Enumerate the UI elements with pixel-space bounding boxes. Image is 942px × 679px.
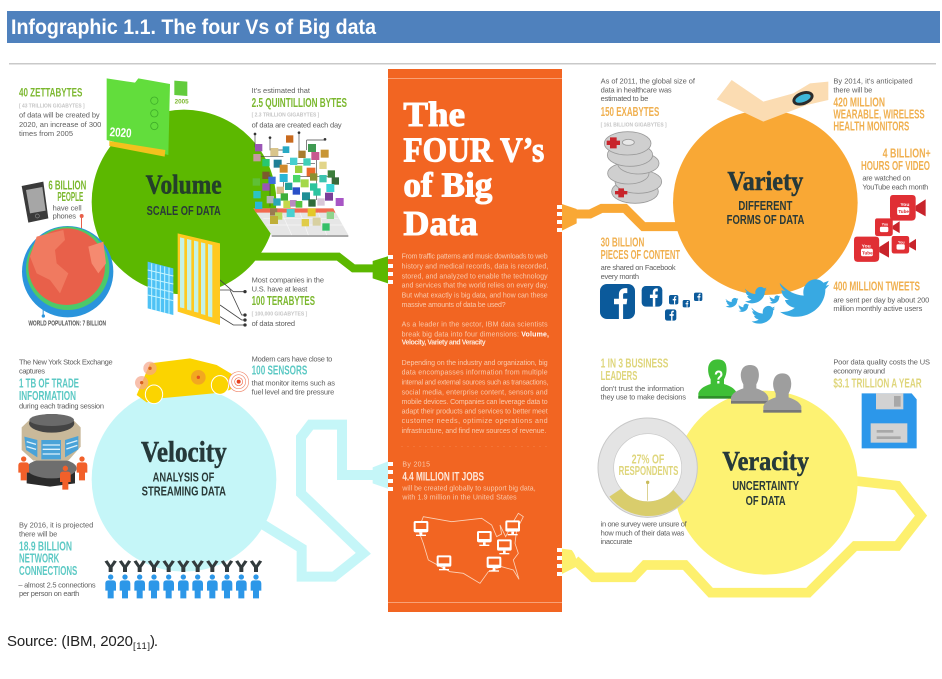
text: intro paragraph xyxy=(402,253,548,309)
text: 420 million wearable monitors xyxy=(833,76,925,134)
text: industry paragraph: adapt their products and services to better meet xyxy=(402,408,548,415)
heading: variety: DIFFERENT xyxy=(738,198,792,213)
text: 100 terabytes: U.S. have at least xyxy=(252,284,308,293)
icon: globe xyxy=(22,214,113,318)
text: 40 zettabytes: 40 ZETTABYTES xyxy=(19,86,82,100)
panel: the four Vs centre column xyxy=(388,69,562,612)
source note: [11] xyxy=(133,641,150,652)
title xyxy=(7,11,940,43)
heading: veracity: OF DATA xyxy=(746,493,786,508)
text: IBM paragraph: As a leader in the sector, IBM data scientists xyxy=(402,322,548,329)
main title: FOUR V’s xyxy=(403,132,544,170)
main title: The xyxy=(403,96,465,134)
text: industry paragraph: Depending on the industry and organization, big xyxy=(402,360,548,367)
text: industry paragraph xyxy=(402,360,548,435)
text: survey caption: inaccurate xyxy=(601,537,632,546)
text: 1 in 3 business leaders: LEADERS xyxy=(601,369,637,383)
panel: volume xyxy=(19,78,390,328)
text: 30 billion pieces of content: 30 BILLION xyxy=(601,236,644,250)
text: 18.9 billion network connections: 18.9 BILLION xyxy=(19,540,72,554)
source note: ). xyxy=(150,633,158,650)
text: 6 billion people xyxy=(48,178,86,221)
text: 1 in 3 business leaders: 1 IN 3 BUSINESS xyxy=(601,357,668,371)
text: IBM paragraph: break big data into four dimensions: Volume, xyxy=(402,331,549,338)
text: $3.1 trillion a year xyxy=(833,358,930,390)
text: 40 zettabytes: 2020, an increase of 300 xyxy=(19,120,101,129)
text: 150 exabytes: [ 161 BILLION GIGABYTES ] xyxy=(601,123,667,129)
text: industry paragraph: infrastructure, and find new sources of revenue. xyxy=(402,428,546,435)
text: 100 sensors: Modern cars have close to xyxy=(252,354,332,363)
text: industry paragraph: customer needs, optimize operations and xyxy=(402,418,548,425)
text: 150 exabytes xyxy=(601,76,696,129)
connector wire: veracity xyxy=(560,481,921,593)
text: 100 terabytes xyxy=(252,275,324,328)
heading: volume xyxy=(146,169,222,218)
icon: phone xyxy=(22,182,48,223)
map: US with monitors xyxy=(414,513,523,583)
text: $3.1 trillion a year: economy around xyxy=(833,366,885,375)
text: 100 terabytes: of data stored xyxy=(252,319,295,328)
text: 40 zettabytes: times from 2005 xyxy=(19,129,73,138)
text: 18.9 billion network connections: CONNECTIONS xyxy=(19,564,77,578)
icon: business leaders xyxy=(698,359,801,413)
circle: veracity xyxy=(674,391,858,575)
text: 1 TB of trade information: INFORMATION xyxy=(19,389,76,403)
icon: memory card 2005 xyxy=(174,81,189,105)
icon: youtube cameras xyxy=(854,195,926,262)
text: 6 billion people: PEOPLE xyxy=(57,190,83,204)
text: survey caption xyxy=(601,520,688,546)
text: industry paragraph: mobile devices. Companies can leverage data to xyxy=(402,399,548,406)
heading: velocity: Velocity xyxy=(141,437,227,469)
text: 30 billion pieces of content: every month xyxy=(601,272,639,281)
text: 6 billion people: phones xyxy=(53,212,76,221)
text: 1 TB of trade information: captures xyxy=(19,366,45,375)
text: 40 zettabytes xyxy=(19,86,101,138)
icon: youtube cameras: Tube xyxy=(862,251,873,256)
icon: memory card 2020: 2020 xyxy=(109,125,132,141)
main title: Data xyxy=(403,205,478,243)
text: IBM paragraph: Velocity, Variety and Veracity xyxy=(402,339,486,346)
text: 100 sensors: fuel level and tire pressure xyxy=(252,387,334,396)
heading: variety: Variety xyxy=(727,166,804,196)
text: 100 sensors: 100 SENSORS xyxy=(252,363,307,377)
text: 1 in 3 business leaders: they use to make decisions xyxy=(601,393,686,402)
text: 2.5 quintillion bytes xyxy=(252,86,347,129)
icon: car with sensors xyxy=(135,358,249,404)
icon: youtube cameras: Tube xyxy=(898,209,910,214)
text: 2.5 quintillion bytes: [ 2.3 TRILLION GIGABYTES ] xyxy=(252,113,320,119)
connector wire: velocity xyxy=(260,425,390,577)
text: 18.9 billion network connections: per person on earth xyxy=(19,589,79,598)
text: 4 billion hours of video: are watched on xyxy=(862,174,911,183)
text: intro paragraph: stored, and analyzed to enable the technology xyxy=(402,273,548,280)
icon: trading hub xyxy=(18,414,87,490)
text: 1 TB of trade information xyxy=(19,358,113,410)
heading: veracity: Veracity xyxy=(722,446,809,476)
text: world population: WORLD POPULATION: 7 BILLION xyxy=(28,319,106,328)
text: 100 terabytes: [ 100,000 GIGABYTES ] xyxy=(252,312,308,318)
text: intro paragraph: history and medical records, data is recorded, xyxy=(402,263,548,270)
text: industry paragraph: internal and external sources such as transactions, xyxy=(402,379,548,386)
heading: veracity xyxy=(722,446,809,508)
icon: data cubes grid xyxy=(253,131,348,237)
connector wire: volume xyxy=(253,256,390,284)
text: 40 zettabytes: of data will be created by xyxy=(19,111,100,120)
text: 4.4 million IT jobs: By 2015 xyxy=(402,462,430,469)
text: 400 million tweets: are sent per day by about 200 xyxy=(833,295,929,304)
heading: volume: SCALE OF DATA xyxy=(147,203,221,218)
text: 420 million wearable monitors: 420 MILLION xyxy=(833,96,885,110)
text: intro paragraph: But what exactly is big data, and how can these xyxy=(402,293,548,300)
text: intro paragraph: and services that the world relies on every day. xyxy=(402,283,548,290)
text: 400 million tweets: million monthly active users xyxy=(833,304,923,313)
text: 2.5 quintillion bytes: of data are created each day xyxy=(252,120,342,129)
icon: youtube cameras: You xyxy=(882,223,888,227)
text: 1 in 3 business leaders: don't trust the information xyxy=(601,384,684,393)
text: intro paragraph: From traffic patterns and music downloads to web xyxy=(402,253,548,260)
text: 18.9 billion network connections: NETWORK xyxy=(19,552,60,566)
heading: velocity xyxy=(141,437,227,499)
text: 420 million wearable monitors: By 2014, it's anticipated xyxy=(833,76,913,85)
text: 150 exabytes: estimated to be xyxy=(601,94,648,103)
heading: velocity: STREAMING DATA xyxy=(142,484,226,499)
text: $3.1 trillion a year: Poor data quality costs the US xyxy=(833,358,930,367)
text: 6 billion people: 6 BILLION xyxy=(48,178,86,192)
text: 30 billion pieces of content: PIECES OF CONTENT xyxy=(601,248,680,262)
circle: velocity xyxy=(92,387,276,572)
circle: volume xyxy=(92,110,276,294)
chart: 27% of respondents donut: RESPONDENTS xyxy=(619,464,678,478)
text: IBM paragraph xyxy=(402,322,549,346)
text: industry paragraph: data encompasses information from multiple xyxy=(402,370,548,377)
connector teeth xyxy=(388,205,562,576)
icon: arm with wearable xyxy=(717,80,828,122)
icon: stacked discs xyxy=(604,132,662,203)
text: 100 sensors xyxy=(252,354,335,396)
heading: variety: FORMS OF DATA xyxy=(727,212,805,227)
text: 150 exabytes: 150 EXABYTES xyxy=(601,105,659,119)
icon: twitter birds xyxy=(726,279,829,324)
text: 4.4 million IT jobs: will be created globally to support big data, xyxy=(401,486,536,493)
text: 1 TB of trade information: during each trading session xyxy=(19,401,104,410)
icon: memory card 2005: 2005 xyxy=(175,98,189,105)
text: survey caption: in one survey were unsure of xyxy=(601,520,688,529)
icon: connected people row xyxy=(105,561,262,598)
text: 2.5 quintillion bytes: 2.5 QUINTILLION BYTES xyxy=(252,96,347,110)
text: 4 billion hours of video xyxy=(861,147,931,191)
panel: velocity xyxy=(18,354,390,598)
text: 100 terabytes: Most companies in the xyxy=(252,275,324,284)
text: 18.9 billion network connections: there will be xyxy=(19,530,57,539)
text: 1 in 3 business leaders xyxy=(601,357,686,402)
text: 1 TB of trade information: The New York Stock Exchange xyxy=(19,358,113,367)
text: 2.5 quintillion bytes: It's estimated that xyxy=(252,86,311,95)
text: 40 zettabytes: [ 43 TRILLION GIGABYTES ] xyxy=(19,103,85,109)
icon: youtube cameras: You xyxy=(898,240,905,244)
icon: memory card 2020 xyxy=(107,78,170,157)
text: 4.4 million IT jobs xyxy=(401,462,536,501)
heading: volume: Volume xyxy=(146,169,222,199)
icon: floppy disk xyxy=(862,393,917,448)
text: 18.9 billion network connections xyxy=(18,521,96,598)
source note: Source: (IBM, 2020 xyxy=(7,633,133,650)
text: 150 exabytes: As of 2011, the global size of xyxy=(601,76,696,85)
text: 18.9 billion network connections: – almost 2.5 connections xyxy=(18,580,96,589)
heading: velocity: ANALYSIS OF xyxy=(153,470,214,485)
heading: veracity: UNCERTAINTY xyxy=(732,478,799,493)
text: 18.9 billion network connections: By 2016, it is projected xyxy=(19,521,93,530)
panel: variety xyxy=(560,76,931,324)
main title xyxy=(403,96,544,243)
icon: youtube cameras: You xyxy=(900,202,909,208)
text: 420 million wearable monitors: there will be xyxy=(833,85,872,94)
circle: variety xyxy=(673,110,858,295)
chart: 27% of respondents donut: 27% OF xyxy=(632,452,665,466)
icon: business leaders: ? xyxy=(714,366,723,387)
heading: variety xyxy=(727,166,805,227)
icon: buildings xyxy=(148,233,247,327)
text: 4 billion hours of video: YouTube each month xyxy=(862,182,928,191)
main title: of Big xyxy=(403,167,492,205)
text: 400 million tweets xyxy=(833,280,929,313)
panel: veracity xyxy=(560,357,930,593)
icon: facebook logos xyxy=(600,284,702,321)
text: intro paragraph: massive amounts of data be used? xyxy=(402,302,506,309)
text: 30 billion pieces of content xyxy=(601,236,680,281)
text: survey caption: how much of their data was xyxy=(601,528,685,537)
text: 100 terabytes: 100 TERABYTES xyxy=(252,294,315,308)
text: industry paragraph: social media, enterprise content, sensors and xyxy=(402,389,548,396)
text: 1 TB of trade information: 1 TB OF TRADE xyxy=(19,377,79,391)
text: 150 exabytes: data in healthcare was xyxy=(601,85,672,94)
text: 4.4 million IT jobs: with 1.9 million in the United States xyxy=(401,494,517,501)
text: 6 billion people: have cell xyxy=(53,203,82,212)
title: Infographic 1.1. The four Vs of Big data xyxy=(11,15,377,39)
text: 30 billion pieces of content: are shared on Facebook xyxy=(601,263,676,272)
chart: 27% of respondents donut xyxy=(598,418,697,517)
icon: youtube cameras: You xyxy=(862,244,871,250)
connector wire: variety xyxy=(560,203,680,232)
text: 100 sensors: that monitor items such as xyxy=(252,379,335,388)
text: 4.4 million IT jobs: 4.4 MILLION IT JOBS xyxy=(402,469,484,483)
